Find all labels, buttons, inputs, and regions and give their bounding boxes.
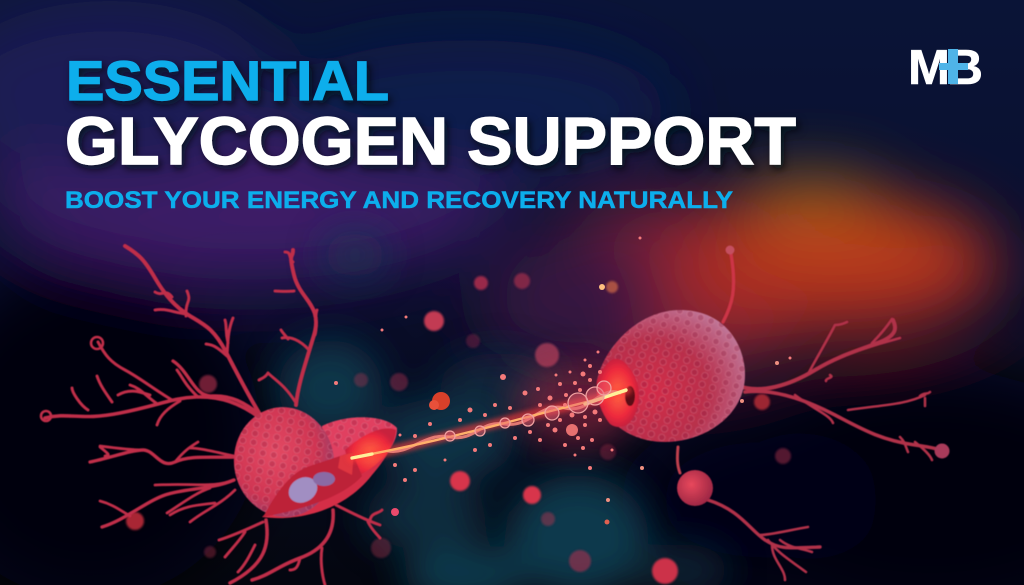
lower ball branch — [708, 500, 820, 580]
lower left branch — [90, 442, 235, 527]
title: essential: ESSENTIAL — [66, 49, 389, 112]
inner folds — [263, 452, 362, 517]
logo: B — [947, 41, 983, 95]
lower lip — [262, 432, 396, 518]
logo: M — [908, 41, 950, 95]
cell body — [597, 310, 745, 442]
glowing mouth — [597, 359, 639, 427]
bottom branches — [219, 505, 382, 585]
left cell dendrites — [41, 246, 382, 585]
right small ball — [677, 470, 713, 506]
upper spine — [723, 254, 734, 322]
spine tip — [726, 246, 734, 254]
blurred background cells — [126, 273, 791, 584]
small stalk — [677, 447, 680, 473]
bubbles along beam — [445, 381, 611, 441]
right cell dendrites — [677, 246, 950, 580]
upper lobe — [322, 417, 397, 478]
title: glycogen support: GLYCOGEN SUPPORT — [65, 104, 796, 179]
blurred teal blobs — [278, 233, 730, 585]
liver body — [227, 401, 341, 523]
upper right branch — [736, 319, 900, 389]
logo — [908, 41, 983, 95]
upper left branch — [125, 246, 261, 416]
lower right branch — [745, 391, 950, 460]
energy beam — [352, 381, 627, 458]
sparkling particles — [334, 236, 792, 524]
purple organ core — [284, 472, 322, 508]
subtitle: BOOST YOUR ENERGY AND RECOVERY NATURALLY — [65, 187, 733, 214]
beam haze — [515, 363, 635, 447]
right cell — [597, 310, 745, 442]
left liver cell — [227, 401, 397, 523]
top central branch — [259, 250, 317, 405]
mid left branch — [41, 337, 260, 425]
